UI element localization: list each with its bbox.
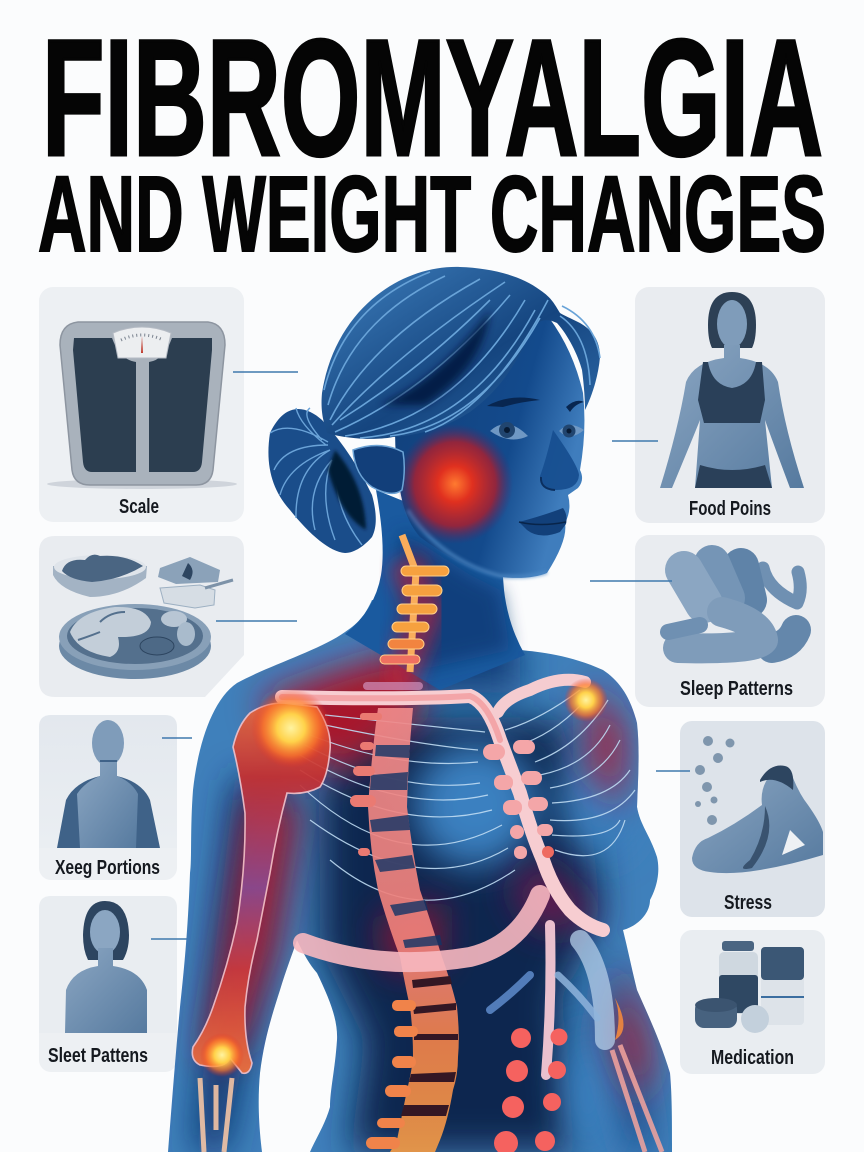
nose — [540, 430, 579, 490]
chest highlights — [413, 743, 638, 1152]
label: Medication: Medication — [711, 1047, 794, 1069]
icon: woman in sportswear — [660, 292, 804, 488]
panel: sleet patterns — [39, 896, 177, 1072]
label: Sleep Patterns: Sleep Patterns — [680, 678, 793, 700]
main spine — [350, 708, 459, 1152]
figure: woman anatomy — [160, 267, 690, 1152]
panel: keep portions — [39, 715, 177, 880]
icon: curled figure — [668, 563, 800, 648]
connector lines — [151, 372, 690, 939]
image area — [39, 896, 177, 1033]
cheek pain glow — [397, 424, 513, 544]
icon: female torso figure — [65, 901, 147, 1033]
face features — [408, 398, 584, 576]
right forearm joint — [612, 998, 662, 1152]
lips — [519, 508, 567, 536]
body silhouette — [160, 580, 690, 1152]
label: Sleet Pattens: Sleet Pattens — [48, 1045, 148, 1067]
bun — [268, 409, 376, 553]
brows and eyes — [487, 398, 540, 407]
label: Stress: Stress — [724, 892, 772, 914]
icon: medication bottles — [695, 941, 804, 1033]
neck shading — [400, 530, 510, 670]
ribs — [300, 690, 635, 900]
left arm bone — [192, 703, 330, 1152]
inflammation glow — [205, 650, 650, 1110]
label: Scale: Scale — [119, 496, 159, 518]
panel: medication — [680, 930, 825, 1074]
belly pain dots — [494, 1028, 568, 1152]
joint glows — [200, 678, 608, 1077]
face — [395, 310, 584, 578]
neck spine — [363, 535, 449, 690]
neck — [345, 490, 525, 690]
icon: bathroom scale — [47, 322, 237, 489]
icon: food tray and plate — [53, 555, 233, 679]
collarbone and ribcage band — [282, 680, 605, 1075]
ear — [353, 445, 404, 493]
icon: male torso figure — [57, 720, 160, 848]
panel: sleep patterns — [635, 535, 825, 707]
image area — [39, 715, 177, 848]
inner shading — [195, 640, 655, 1152]
label: Food Poins: Food Poins — [689, 498, 771, 520]
main hair mass — [322, 267, 600, 439]
sternum rib knobs — [483, 740, 554, 859]
icon: dots and crouching figure — [692, 736, 823, 873]
label: Keep Portions: Xeeg Portions — [55, 857, 160, 879]
panel: stress — [680, 721, 825, 917]
hair — [268, 267, 600, 553]
jaw highlight — [408, 510, 547, 576]
panel: food poins — [635, 287, 825, 523]
panel: food — [39, 536, 244, 697]
panel: scale — [39, 287, 244, 522]
title — [38, 6, 826, 274]
